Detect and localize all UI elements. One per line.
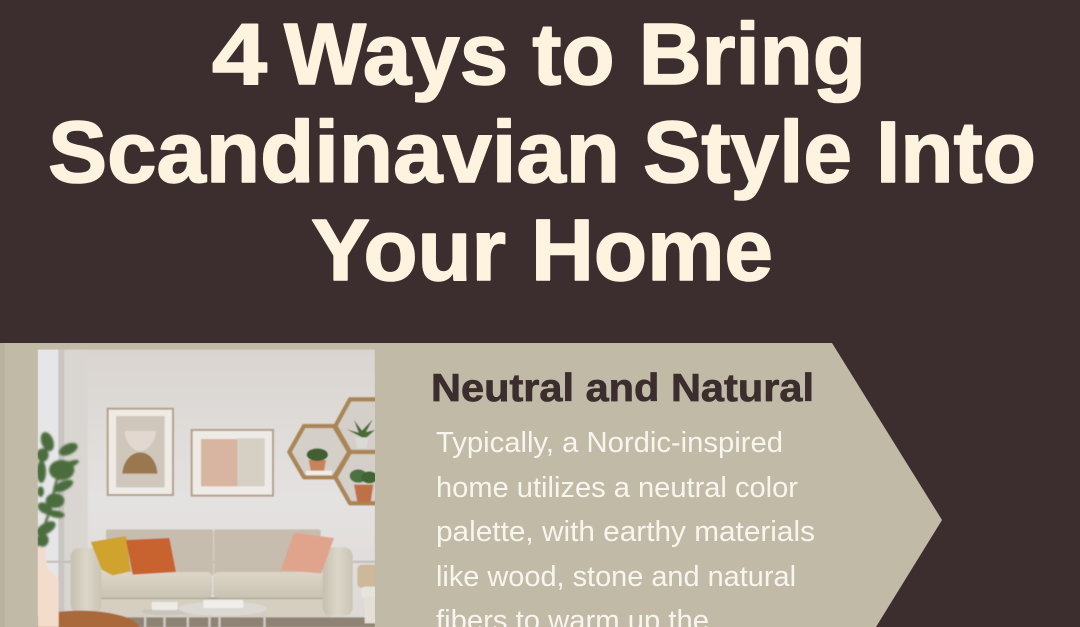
cushions bbox=[91, 533, 334, 575]
hexagon shelves bbox=[286, 396, 375, 506]
body text: like wood, stone and natural bbox=[436, 561, 796, 593]
floor bbox=[118, 617, 375, 627]
title: Scandinavian bbox=[48, 104, 620, 201]
heading: neutral and natural: Neutral and Natural bbox=[431, 367, 814, 410]
title: 4 bbox=[212, 6, 267, 103]
wooden tabletop and vase bbox=[38, 546, 140, 627]
panel: neutral and natural arrow bbox=[0, 343, 942, 627]
artwork frame right bbox=[191, 429, 274, 497]
sofa bbox=[71, 529, 353, 617]
title: Ways to Bring bbox=[284, 6, 866, 103]
plant leaves bbox=[34, 430, 80, 547]
title: Your bbox=[311, 202, 506, 299]
potted plants bbox=[306, 419, 377, 502]
body text: Typically, a Nordic-inspired bbox=[436, 427, 783, 459]
title bbox=[48, 6, 1036, 299]
rattan chair bbox=[357, 565, 378, 623]
body text: palette, with earthy materials bbox=[436, 516, 815, 548]
artwork frame left bbox=[107, 408, 174, 496]
body text: home utilizes a neutral color bbox=[436, 472, 798, 504]
title: Style bbox=[643, 104, 852, 201]
title: Into bbox=[876, 104, 1036, 201]
body text bbox=[436, 427, 815, 627]
photo: living room bbox=[21, 349, 393, 627]
title: Home bbox=[531, 202, 773, 299]
coffee table bbox=[141, 600, 267, 627]
